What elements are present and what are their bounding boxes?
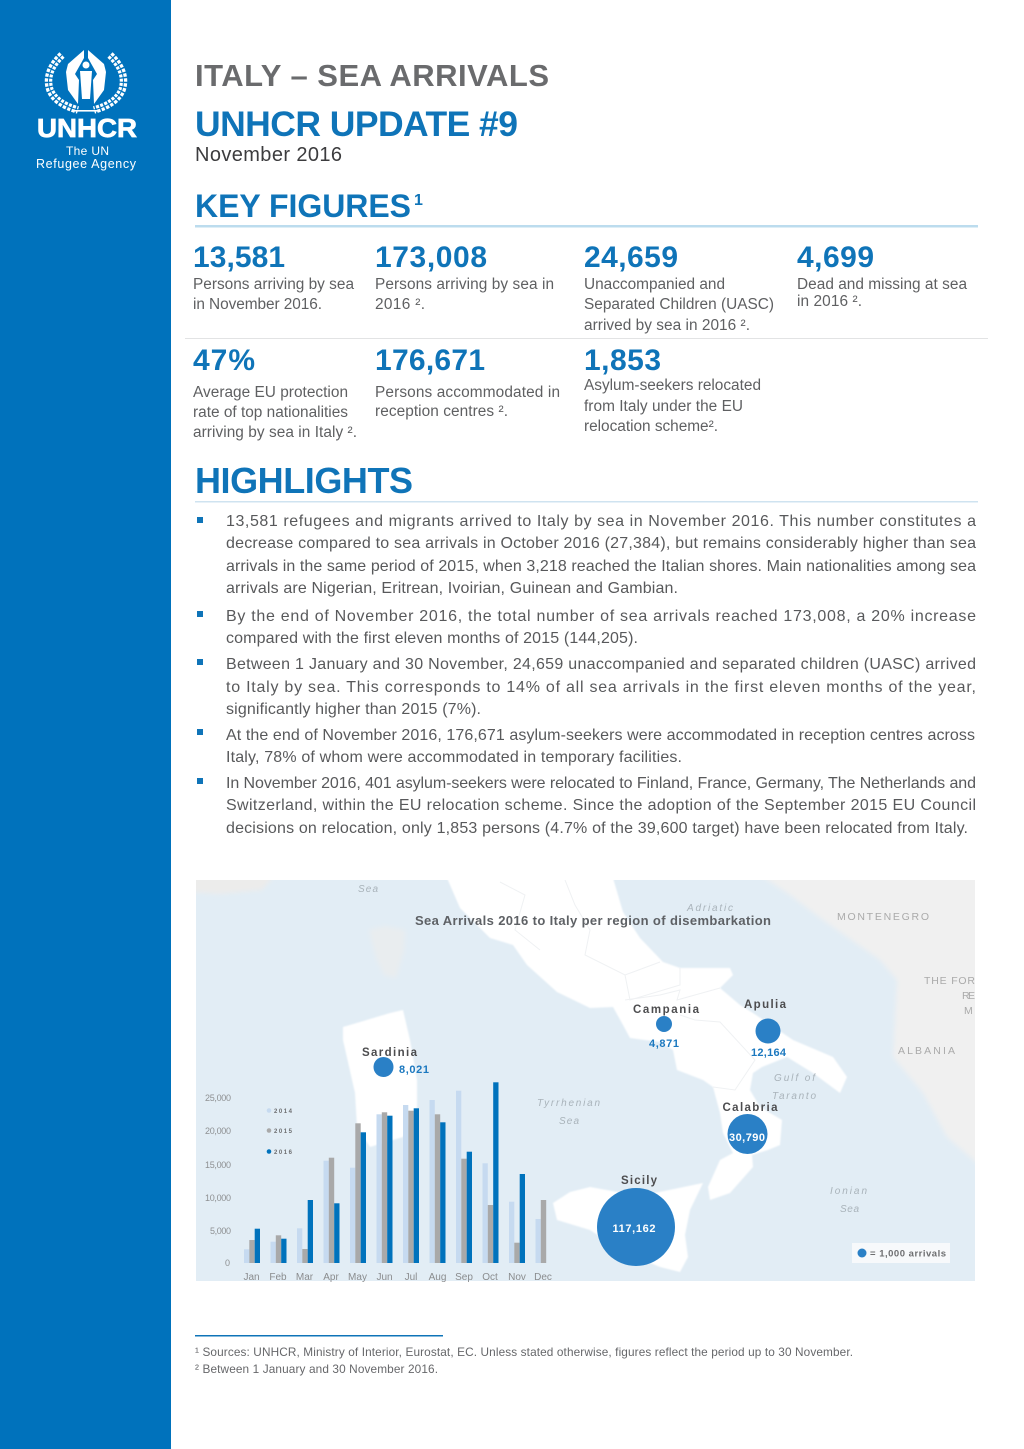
map sea and country labels: Gulf of (774, 1073, 816, 1084)
map legend: = 1,000 arrivals (870, 1248, 946, 1260)
figure: sea arrivals in 2016: Persons arriving by sea in (375, 276, 554, 293)
footnotes (195, 1335, 853, 1376)
figure: relocated: 1,853 (584, 344, 661, 377)
region: Sardinia: 8,021 (399, 1064, 429, 1076)
map sea and country labels: THE FOR (924, 975, 975, 987)
bullet 1 (197, 513, 976, 597)
bullet 5: Switzerland, within the EU relocation scheme. Since the adoption of the September 2015 EU Council (226, 797, 976, 814)
bars 2015 (249, 1111, 546, 1263)
figure: sea arrivals in 2016: 173,008 (375, 241, 487, 274)
figure: sea arrivals in November (193, 241, 354, 313)
region: Sardinia: Sardinia (362, 1047, 418, 1059)
icon: UNHCR logo emblem (48, 50, 124, 112)
bullet 5 (197, 775, 976, 837)
region: Sicily: Sicily (621, 1175, 658, 1187)
region: Apulia (744, 999, 787, 1059)
figure: relocated: from Italy under the EU (584, 398, 743, 415)
panel: map of sea arrivals per region (190, 875, 985, 1283)
region: Campania: 4,871 (649, 1038, 679, 1050)
logo wordmark: Refugee Agency (36, 157, 137, 171)
bullet 1: 13,581 refugees and migrants arrived to Italy by sea in November 2016. This number constitutes a (226, 513, 976, 530)
region: Campania: Campania (633, 1004, 700, 1016)
y axis labels: 0 (225, 1258, 230, 1268)
bars 2014 (244, 1091, 541, 1263)
figure: accommodated: Persons accommodated in (375, 384, 560, 401)
figure: UASC (584, 241, 774, 334)
bullet 4: At the end of November 2016, 176,671 asylum-seekers were accommodated in reception centres across (226, 727, 975, 744)
figure: UASC: 24,659 (584, 241, 678, 274)
panel: key figures (185, 241, 988, 441)
region: Campania (633, 1004, 700, 1050)
bullet 2 (197, 608, 976, 647)
panel: blue sidebar with UNHCR logo (0, 0, 171, 1449)
bullet 1: decrease compared to sea arrivals in October 2016 (27,384), but remains considerably higher than sea (226, 535, 976, 552)
figure: UASC: Unaccompanied and (584, 276, 725, 293)
map sea and country labels: Ionian (830, 1186, 867, 1197)
region: Apulia: 12,164 (751, 1047, 787, 1059)
map sea and country labels: Taranto (772, 1091, 816, 1102)
region: Calabria (722, 1102, 778, 1154)
figure: protection rate: arriving by sea in Italy ². (193, 424, 357, 441)
y axis labels: 15,000 (205, 1160, 231, 1170)
map sea and country labels: Adriatic (686, 903, 733, 914)
y axis labels: 25,000 (205, 1093, 231, 1103)
chart legend: 2016 (274, 1150, 293, 1156)
figure: UASC: Separated Children (UASC) (584, 296, 774, 313)
map base (190, 875, 985, 1281)
footnotes: ² Between 1 January and 30 November 2016. (195, 1362, 438, 1376)
figure: sea arrivals in November: in November 2016. (193, 296, 322, 313)
figure: dead and missing: in 2016 ². (797, 293, 862, 310)
map sea and country labels: Tyrrhenian (537, 1098, 600, 1109)
x axis months: Nov (508, 1272, 526, 1283)
bullet 3: to Italy by sea. This corresponds to 14% of all sea arrivals in the first eleven months of the year, (226, 679, 976, 696)
bullet 1: arrivals are Nigerian, Eritrean, Ivoirian, Guinean and Gambian. (226, 580, 678, 597)
heading: key figures: 1 (414, 192, 423, 209)
chart legend: 2014 (274, 1109, 293, 1115)
x axis months (243, 1272, 552, 1283)
bullet 1: arrivals in the same period of 2015, when 3,218 reached the Italian shores. Main nationalities among sea (226, 558, 976, 575)
map legend (852, 1243, 950, 1263)
bullet 2: By the end of November 2016, the total number of sea arrivals reached 173,008, a 20% increase (226, 608, 976, 625)
figure: UASC: arrived by sea in 2016 ². (584, 317, 750, 334)
bullet 4: Italy, 78% of whom were accommodated in temporary facilities. (226, 749, 682, 766)
bullet 5: decisions on relocation, only 1,853 persons (4.7% of the 39,600 target) have been relocated from Italy. (226, 820, 968, 837)
chart legend (267, 1108, 293, 1156)
figure: protection rate: Average EU protection (193, 384, 348, 401)
region: Apulia: Apulia (744, 999, 787, 1011)
bullet 3 (197, 656, 976, 718)
logo wordmark: UNHCR (37, 113, 137, 143)
x axis months: Oct (482, 1272, 498, 1283)
x axis months: May (348, 1272, 367, 1283)
figure: relocated (584, 344, 761, 435)
x axis months: Mar (296, 1272, 314, 1283)
figure: accommodated: 176,671 (375, 344, 485, 377)
figure: accommodated: reception centres ². (375, 403, 508, 420)
x axis months: Jul (405, 1272, 417, 1283)
heading: highlights: HIGHLIGHTS (195, 460, 413, 501)
x axis months: Sep (455, 1272, 473, 1283)
bullet 2: compared with the first eleven months of 2015 (144,205). (226, 630, 638, 647)
bullet 4 (197, 727, 975, 766)
region: Calabria: 30,790 (729, 1132, 765, 1144)
figure: relocated: Asylum-seekers relocated (584, 377, 761, 394)
map sea and country labels (358, 884, 975, 1215)
region: Sardinia (362, 1047, 429, 1077)
title: ITALY – SEA ARRIVALS (195, 58, 549, 93)
figure: sea arrivals in November: 13,581 (193, 241, 285, 274)
map sea and country labels: RE (962, 990, 975, 1002)
map sea and country labels: Sea (840, 1204, 859, 1215)
subtitle: update number: UNHCR UPDATE #9 (195, 104, 518, 144)
chart legend: 2015 (274, 1129, 293, 1135)
map sea and country labels: MONTENEGRO (837, 911, 929, 923)
bar chart: monthly arrivals 2014-2016 (205, 1082, 552, 1283)
x axis months: Jan (243, 1272, 260, 1283)
bullet 3: Between 1 January and 30 November, 24,659 unaccompanied and separated children (UASC) arrived (226, 656, 976, 673)
figure: sea arrivals in 2016 (375, 241, 554, 313)
figure: dead and missing (797, 241, 967, 310)
map sea and country labels: ALBANIA (898, 1045, 955, 1057)
region: Sicily (597, 1175, 675, 1266)
bars 2016 (255, 1082, 525, 1263)
y axis labels: 20,000 (205, 1126, 231, 1136)
y axis labels: 10,000 (205, 1193, 231, 1203)
figure: protection rate (193, 344, 357, 441)
map sea and country labels: Sea (559, 1116, 579, 1127)
figure: sea arrivals in 2016: 2016 ². (375, 296, 425, 313)
x axis months: Dec (534, 1272, 552, 1283)
figure: sea arrivals in November: Persons arriving by sea (193, 276, 354, 293)
x axis months: Apr (323, 1272, 339, 1283)
figure: dead and missing: Dead and missing at sea (797, 276, 967, 293)
map sea and country labels: M (964, 1005, 973, 1017)
figure: protection rate: rate of top nationalities (193, 404, 348, 421)
figure: protection rate: 47% (193, 344, 255, 377)
bullet 5: In November 2016, 401 asylum-seekers were relocated to Finland, France, Germany, The Netherlands and (226, 775, 976, 792)
x axis months: Jun (376, 1272, 393, 1283)
footnotes: ¹ Sources: UNHCR, Ministry of Interior, Eurostat, EC. Unless stated otherwise, figures reflect the period up to 30 November. (195, 1345, 853, 1359)
date: November 2016 (195, 144, 342, 166)
y axis labels (205, 1093, 231, 1268)
region: Calabria: Calabria (722, 1102, 778, 1114)
figure: dead and missing: 4,699 (797, 241, 874, 274)
figure: accommodated (375, 344, 560, 420)
logo wordmark: The UN (66, 144, 109, 158)
map sea and country labels: Sea (358, 884, 378, 895)
map title: Sea Arrivals 2016 to Italy per region of disembarkation (415, 913, 771, 928)
heading: key figures: KEY FIGURES (195, 188, 411, 224)
x axis months: Aug (429, 1272, 446, 1283)
figure: relocated: relocation scheme². (584, 418, 718, 435)
region: Sicily: 117,162 (612, 1223, 656, 1235)
y axis labels: 5,000 (210, 1226, 231, 1236)
x axis months: Feb (269, 1272, 287, 1283)
bullet 3: significantly higher than 2015 (7%). (226, 701, 481, 718)
panel: highlights list (197, 513, 976, 837)
logo wordmark (36, 113, 137, 171)
